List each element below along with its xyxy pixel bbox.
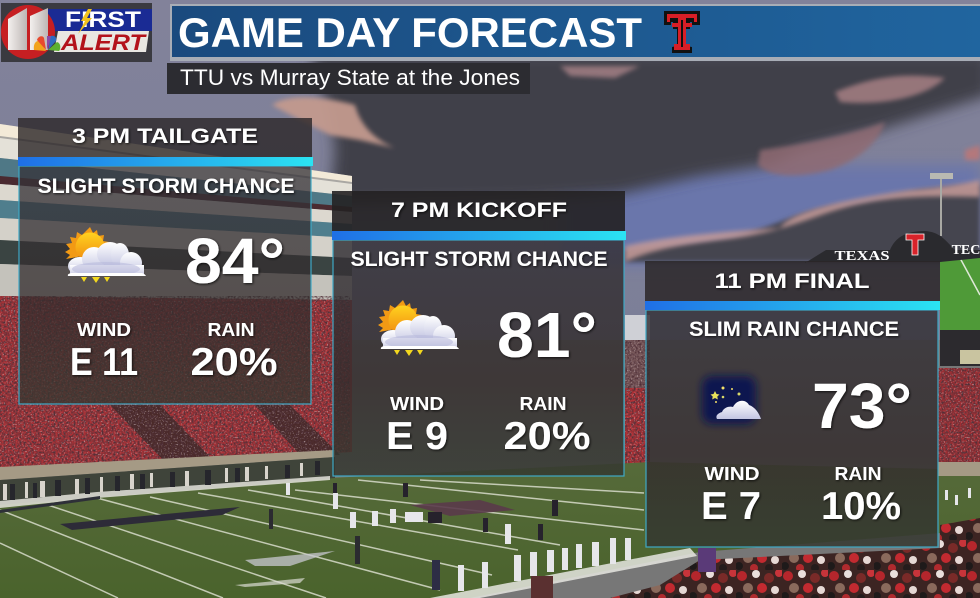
condition: SLIGHT STORM CHANCE (38, 175, 294, 198)
icon: partly cloudy (65, 227, 146, 283)
icon: red 11 circle (1, 5, 55, 59)
scoreboard sign: Texas Tech (805, 231, 980, 264)
rain value: 10% (821, 485, 901, 528)
red crowd (0, 296, 980, 467)
rain label: RAIN (208, 319, 254, 340)
wind value: E 7 (701, 485, 761, 528)
panel heading: 11 PM FINAL (714, 270, 870, 293)
wind label: WIND (77, 319, 131, 340)
icon: peacock (34, 36, 60, 51)
panel: 3 PM Tailgate (18, 118, 313, 404)
stadium stands left (0, 124, 352, 310)
condition: SLIM RAIN CHANCE (689, 318, 899, 341)
scoreboard sign: Texas Tech: TEXAS (834, 249, 890, 264)
condition: SLIGHT STORM CHANCE (350, 248, 608, 271)
players (269, 483, 971, 598)
temperature: 84° (185, 225, 285, 297)
wind label: WIND (704, 463, 760, 484)
temperature: 81° (497, 299, 597, 371)
logo banner: FIRST (65, 7, 142, 32)
wind value: E 11 (70, 341, 138, 384)
rain value: 20% (504, 415, 590, 458)
panel: 11 PM Final (645, 261, 940, 547)
icon: Texas Tech double T (664, 11, 700, 53)
icon: night cloud (702, 376, 761, 424)
rain label: RAIN (834, 463, 882, 484)
panel heading: 7 PM KICKOFF (391, 199, 567, 222)
panel heading: 3 PM TAILGATE (72, 125, 258, 148)
rain label: RAIN (520, 393, 566, 414)
bottom-right crowd (610, 518, 980, 598)
icon: partly cloudy (378, 300, 459, 356)
wind label: WIND (390, 393, 444, 414)
scoreboard sign: Texas Tech: TEC (952, 243, 980, 258)
football field (0, 258, 980, 598)
logo: 11 First Alert (1, 3, 152, 62)
panel: 7 PM Kickoff (332, 191, 626, 476)
light pole (930, 173, 953, 236)
sideline wall and staff (0, 450, 335, 513)
title banner (170, 4, 980, 61)
stands right of kickoff panel (625, 315, 980, 390)
sky with clouds (0, 0, 980, 340)
wind value: E 9 (386, 415, 448, 458)
logo banner: ALERT (60, 30, 147, 55)
rain value: 20% (190, 341, 278, 384)
temperature: 73° (812, 370, 912, 442)
heading: GAME DAY FORECAST (178, 9, 642, 56)
logo banner (48, 7, 152, 55)
subtitle: TTU vs Murray State at the Jones (180, 65, 520, 90)
